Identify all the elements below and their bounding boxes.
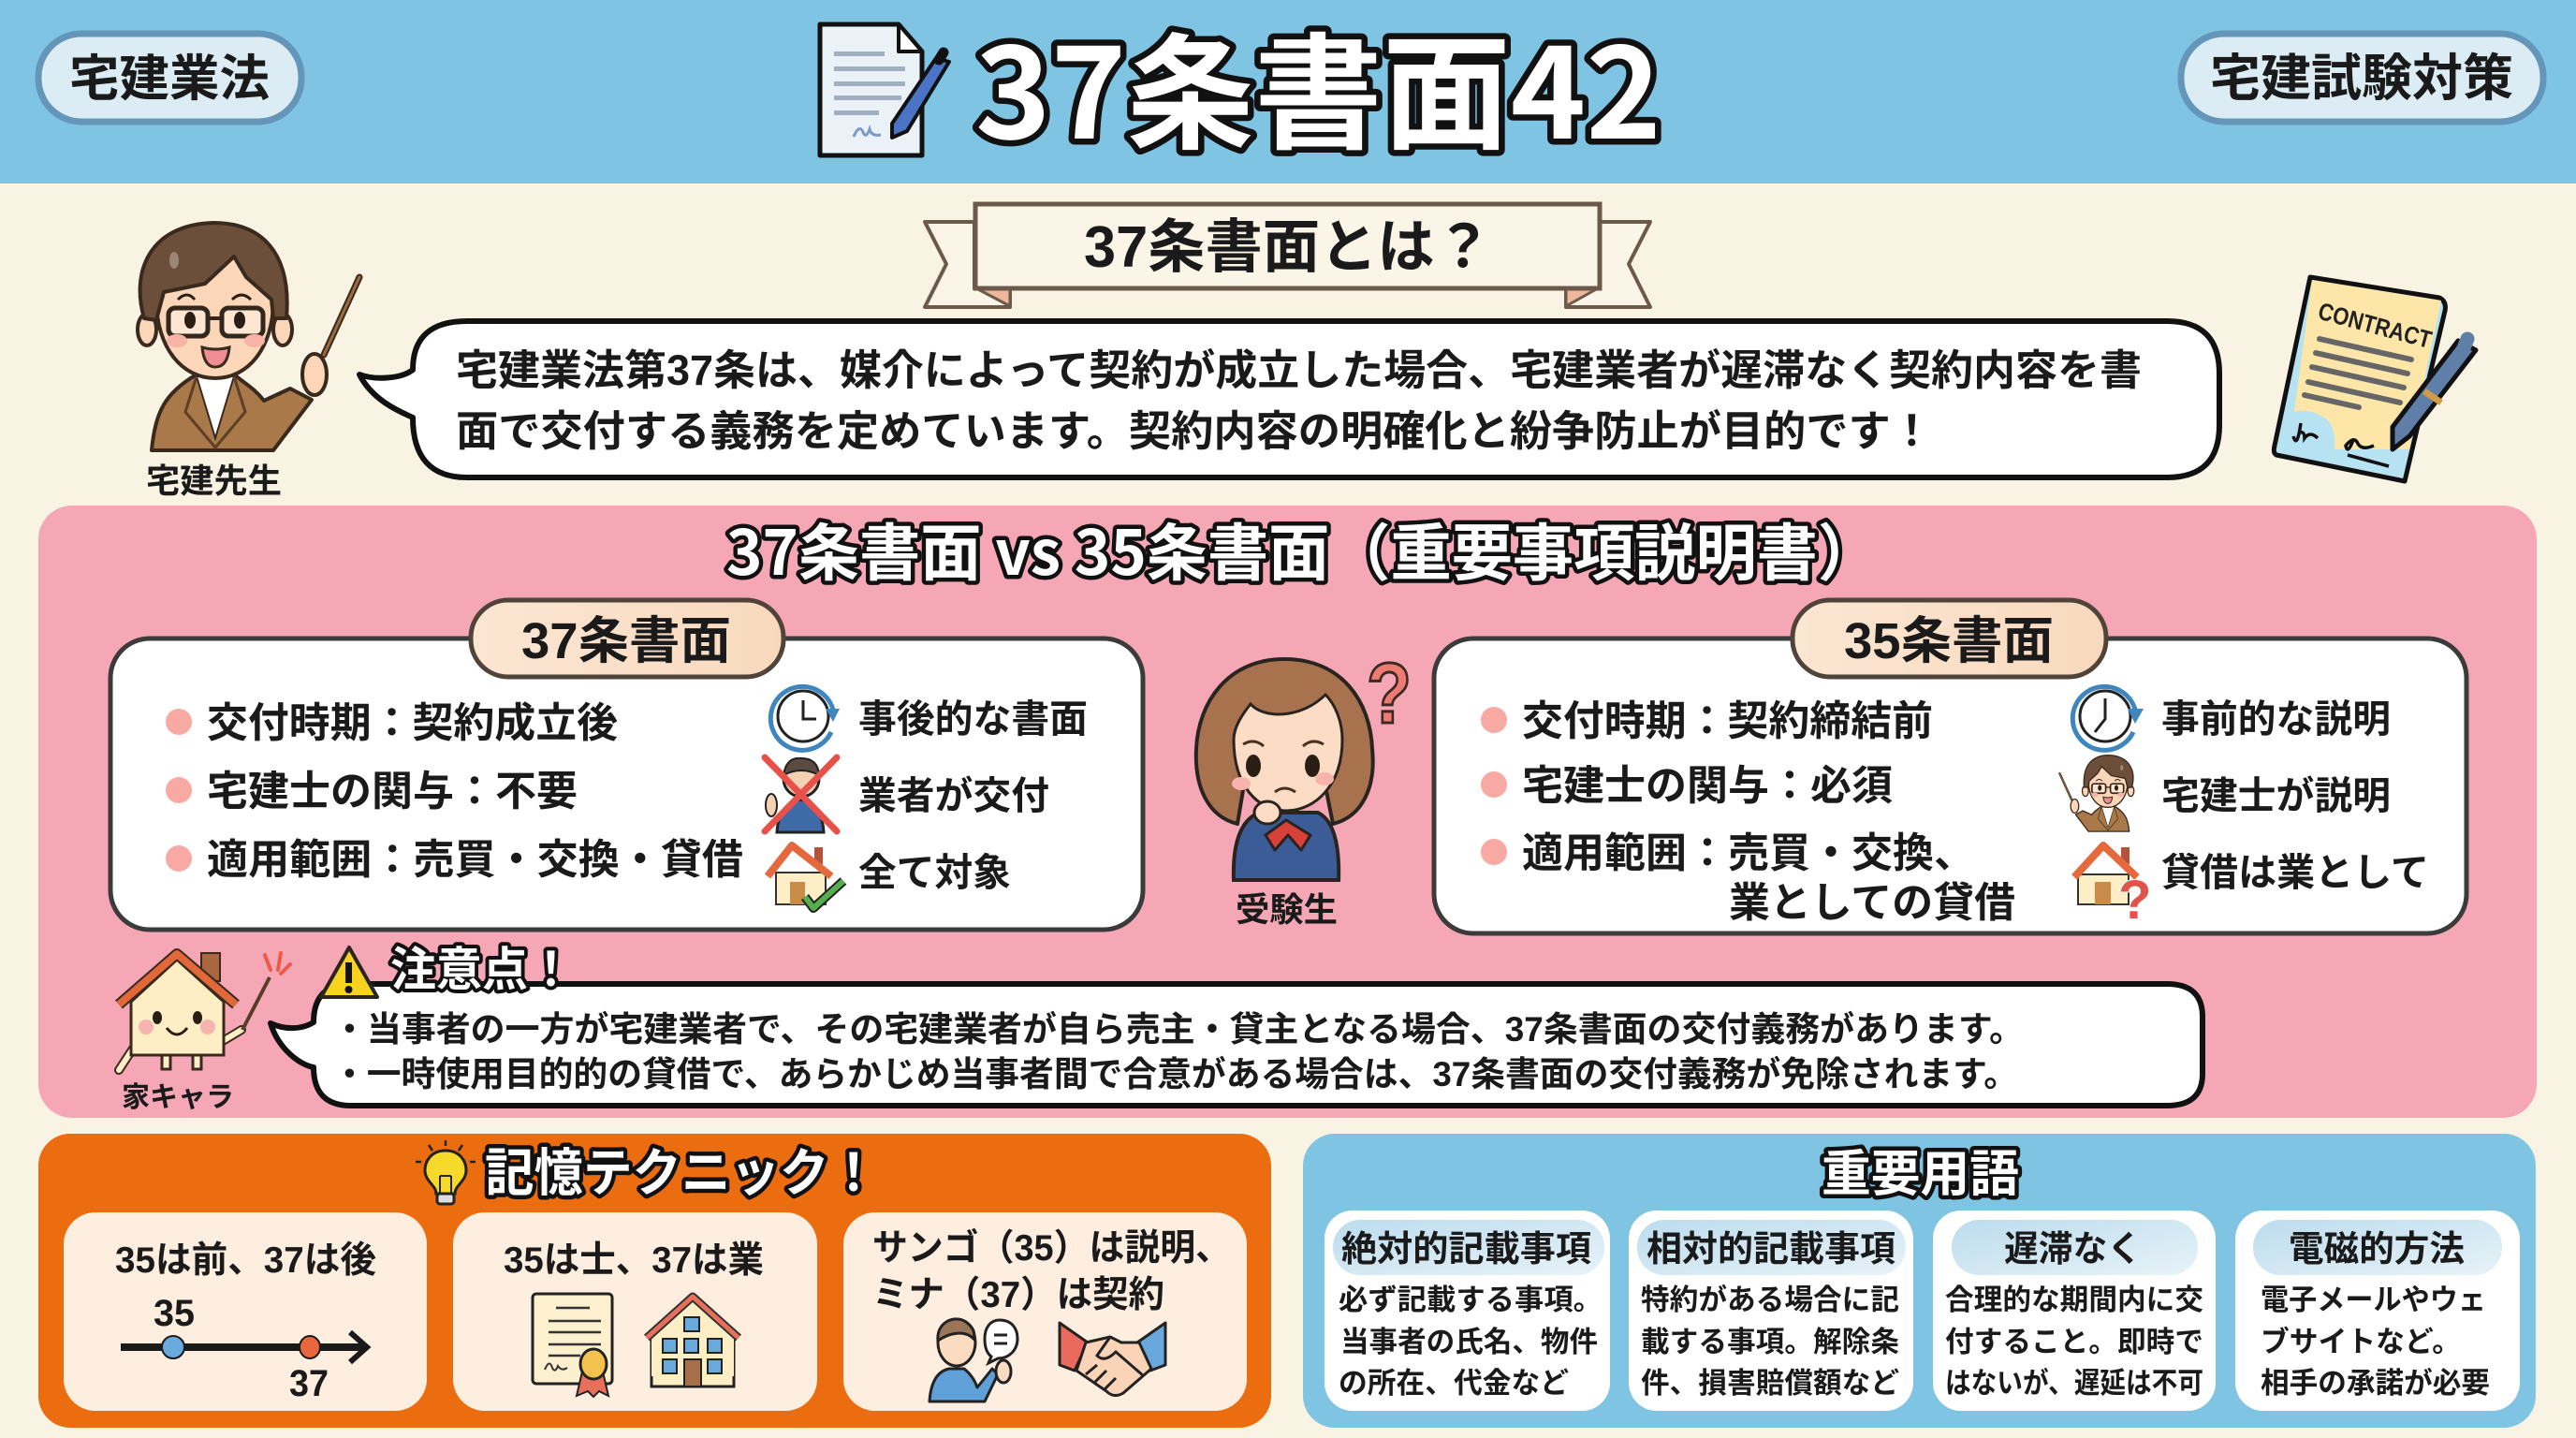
term card: 絶対的記載事項 bbox=[1325, 1211, 1610, 1411]
bullet list: 交付時期：契約成立後 bbox=[207, 700, 618, 746]
term card: 電磁的方法: ブサイトなど。 bbox=[2261, 1326, 2461, 1358]
icon: contract and pen bbox=[2274, 277, 2476, 481]
timeline arrow: 35 bbox=[154, 1293, 195, 1334]
icon: building bbox=[647, 1296, 739, 1387]
panel: key terms bbox=[1303, 1134, 2536, 1428]
term card: 絶対的記載事項: 絶対的記載事項 bbox=[1341, 1230, 1591, 1269]
term card: 遅滞なく: 合理的な期間内に交 bbox=[1945, 1284, 2203, 1316]
icon: small teacher bbox=[2059, 756, 2134, 831]
card: 37条書面 bbox=[110, 600, 1143, 930]
label: 貸借は業として: 貸借は業として bbox=[2161, 851, 2429, 894]
ribbon heading: 37条書面とは bbox=[925, 204, 1650, 307]
callout bubble: cautions: ・一時使用目的的の貸借で、あらかじめ当事者間で合意がある場合は、37条書面の交付義務が免除されます。 bbox=[332, 1055, 2018, 1093]
icon: clock before bbox=[2072, 686, 2144, 750]
icon: warning triangle bbox=[321, 947, 377, 997]
icon: light bulb bbox=[416, 1140, 476, 1204]
term card: 遅滞なく: 遅滞なく bbox=[2004, 1230, 2142, 1269]
icon: house with check bbox=[768, 845, 843, 908]
icon: house with question mark: ? bbox=[2118, 870, 2151, 931]
tag: 宅建業法: 宅建業法 bbox=[69, 51, 270, 107]
tag: 宅建業法 bbox=[38, 34, 301, 122]
label: 事後的な書面: 事後的な書面 bbox=[858, 697, 1088, 741]
label: 事前的な説明: 事前的な説明 bbox=[2161, 697, 2391, 741]
icon: contract and pen: CONTRACT bbox=[2315, 297, 2435, 354]
term card: 相対的記載事項: 相対的記載事項 bbox=[1647, 1230, 1895, 1269]
heading: 記憶テクニック: 記憶テクニック！ bbox=[485, 1144, 878, 1202]
bullet list bbox=[1481, 698, 2015, 926]
header band bbox=[0, 0, 2576, 183]
term card: 電磁的方法: 電磁的方法 bbox=[2289, 1230, 2465, 1269]
card: 35は前、37は後: 35は前、37は後 bbox=[115, 1240, 376, 1281]
label: 受験生: 受験生 bbox=[1236, 890, 1338, 929]
character: 宅建先生 bbox=[138, 223, 359, 450]
tag: 宅建試験対策 bbox=[2181, 34, 2543, 122]
term card: 遅滞なく bbox=[1933, 1211, 2216, 1411]
heading: 重要用語: 重要用語 bbox=[1822, 1147, 2019, 1202]
heading: 注意点: 注意点！ bbox=[390, 944, 574, 996]
bullet list: 適用範囲：売買・交換・貸借 bbox=[207, 837, 743, 883]
term card: 遅滞なく: はないが、遅延は不可 bbox=[1945, 1367, 2203, 1400]
icon: house with question mark bbox=[2074, 845, 2151, 931]
tab: 35条書面: 35条書面 bbox=[1844, 613, 2054, 669]
timeline arrow bbox=[121, 1293, 367, 1404]
term card: 相対的記載事項: 特約がある場合に記 bbox=[1641, 1284, 1899, 1316]
panel: 37条 vs 35条 comparison bbox=[38, 504, 2537, 1118]
bullet list bbox=[166, 700, 743, 883]
tab: 35条書面 bbox=[1793, 600, 2106, 677]
callout bubble: cautions bbox=[271, 984, 2203, 1106]
speech bubble: intro bbox=[359, 321, 2219, 477]
icon: handshake bbox=[1060, 1323, 1165, 1396]
card: 35は士、37は業: 35は士、37は業 bbox=[504, 1240, 764, 1281]
card: 35は前、37は後 bbox=[64, 1212, 427, 1411]
speech bubble: intro: 宅建業法第37条は、媒介によって契約が成立した場合、宅建業者が遅滞なく契約内容を書 bbox=[456, 346, 2142, 394]
comparison heading: 37条書面 vs 35条書面（重要事項説明書） bbox=[726, 504, 1879, 594]
term card: 絶対的記載事項: 当事者の氏名、物件 bbox=[1340, 1326, 1598, 1358]
icon: certificate bbox=[533, 1294, 612, 1397]
term card: 相対的記載事項: 件、損害賠償額など bbox=[1641, 1367, 1899, 1400]
term card: 遅滞なく: 付すること。即時で bbox=[1945, 1326, 2203, 1358]
timeline arrow: 37 bbox=[289, 1363, 329, 1404]
bullet list: 宅建士の関与：必須 bbox=[1522, 763, 1893, 809]
card: サンゴ・ミナ bbox=[843, 1212, 1247, 1411]
label: 全て対象: 全て対象 bbox=[858, 851, 1011, 894]
card: サンゴ・ミナ: ミナ（37）は契約 bbox=[872, 1275, 1164, 1315]
character: house mascot bbox=[119, 953, 290, 1070]
card: 35は士、37は業 bbox=[453, 1212, 817, 1411]
term card: 電磁的方法 bbox=[2235, 1211, 2520, 1411]
icon: document and pen bbox=[820, 24, 949, 155]
term card: 電磁的方法: 電子メールやウェ bbox=[2261, 1284, 2486, 1316]
bullet list: 適用範囲：売買・交換、 bbox=[1522, 830, 1975, 876]
tab: 37条書面 bbox=[471, 600, 783, 677]
speech bubble: intro: 面で交付する義務を定めています。契約内容の明確化と紛争防止が目的です！ bbox=[456, 407, 1933, 455]
callout bubble: cautions: ・当事者の一方が宅建業者で、その宅建業者が自ら売主・貸主となる場合、37条書面の交付義務があります。 bbox=[332, 1010, 2024, 1049]
character: student with question mark bbox=[1196, 646, 1412, 880]
character: student with question mark: ? bbox=[1367, 646, 1412, 741]
label: 宅建先生: 宅建先生 bbox=[146, 462, 282, 500]
tab: 37条書面: 37条書面 bbox=[521, 613, 731, 669]
card: サンゴ・ミナ: サンゴ（35）は説明、 bbox=[872, 1228, 1231, 1269]
panel: memory techniques bbox=[38, 1134, 1271, 1428]
icon: clock after bbox=[770, 686, 840, 750]
term card: 絶対的記載事項: 必ず記載する事項。 bbox=[1339, 1284, 1603, 1316]
label: 業者が交付: 業者が交付 bbox=[858, 774, 1049, 817]
term card: 絶対的記載事項: の所在、代金など bbox=[1339, 1367, 1569, 1400]
label: 宅建士が説明: 宅建士が説明 bbox=[2161, 774, 2391, 817]
tag: 宅建試験対策: 宅建試験対策 bbox=[2210, 51, 2513, 107]
term card: 相対的記載事項 bbox=[1629, 1211, 1913, 1411]
label: 家キャラ: 家キャラ bbox=[122, 1082, 234, 1113]
bullet list: 宅建士の関与：不要 bbox=[207, 769, 578, 814]
icon: person explaining bbox=[929, 1319, 1017, 1401]
bullet list: 業としての貸借 bbox=[1729, 880, 2015, 926]
term card: 電磁的方法: 相手の承諾が必要 bbox=[2261, 1367, 2490, 1400]
bullet list: 交付時期：契約締結前 bbox=[1522, 698, 1933, 744]
card: 35条書面 bbox=[1434, 600, 2466, 933]
icon: crossed-out agent bbox=[765, 757, 837, 832]
ribbon heading: 37条書面とは: 37条書面とは？ bbox=[1084, 215, 1492, 280]
term card: 相対的記載事項: 載する事項。解除条 bbox=[1641, 1326, 1899, 1358]
